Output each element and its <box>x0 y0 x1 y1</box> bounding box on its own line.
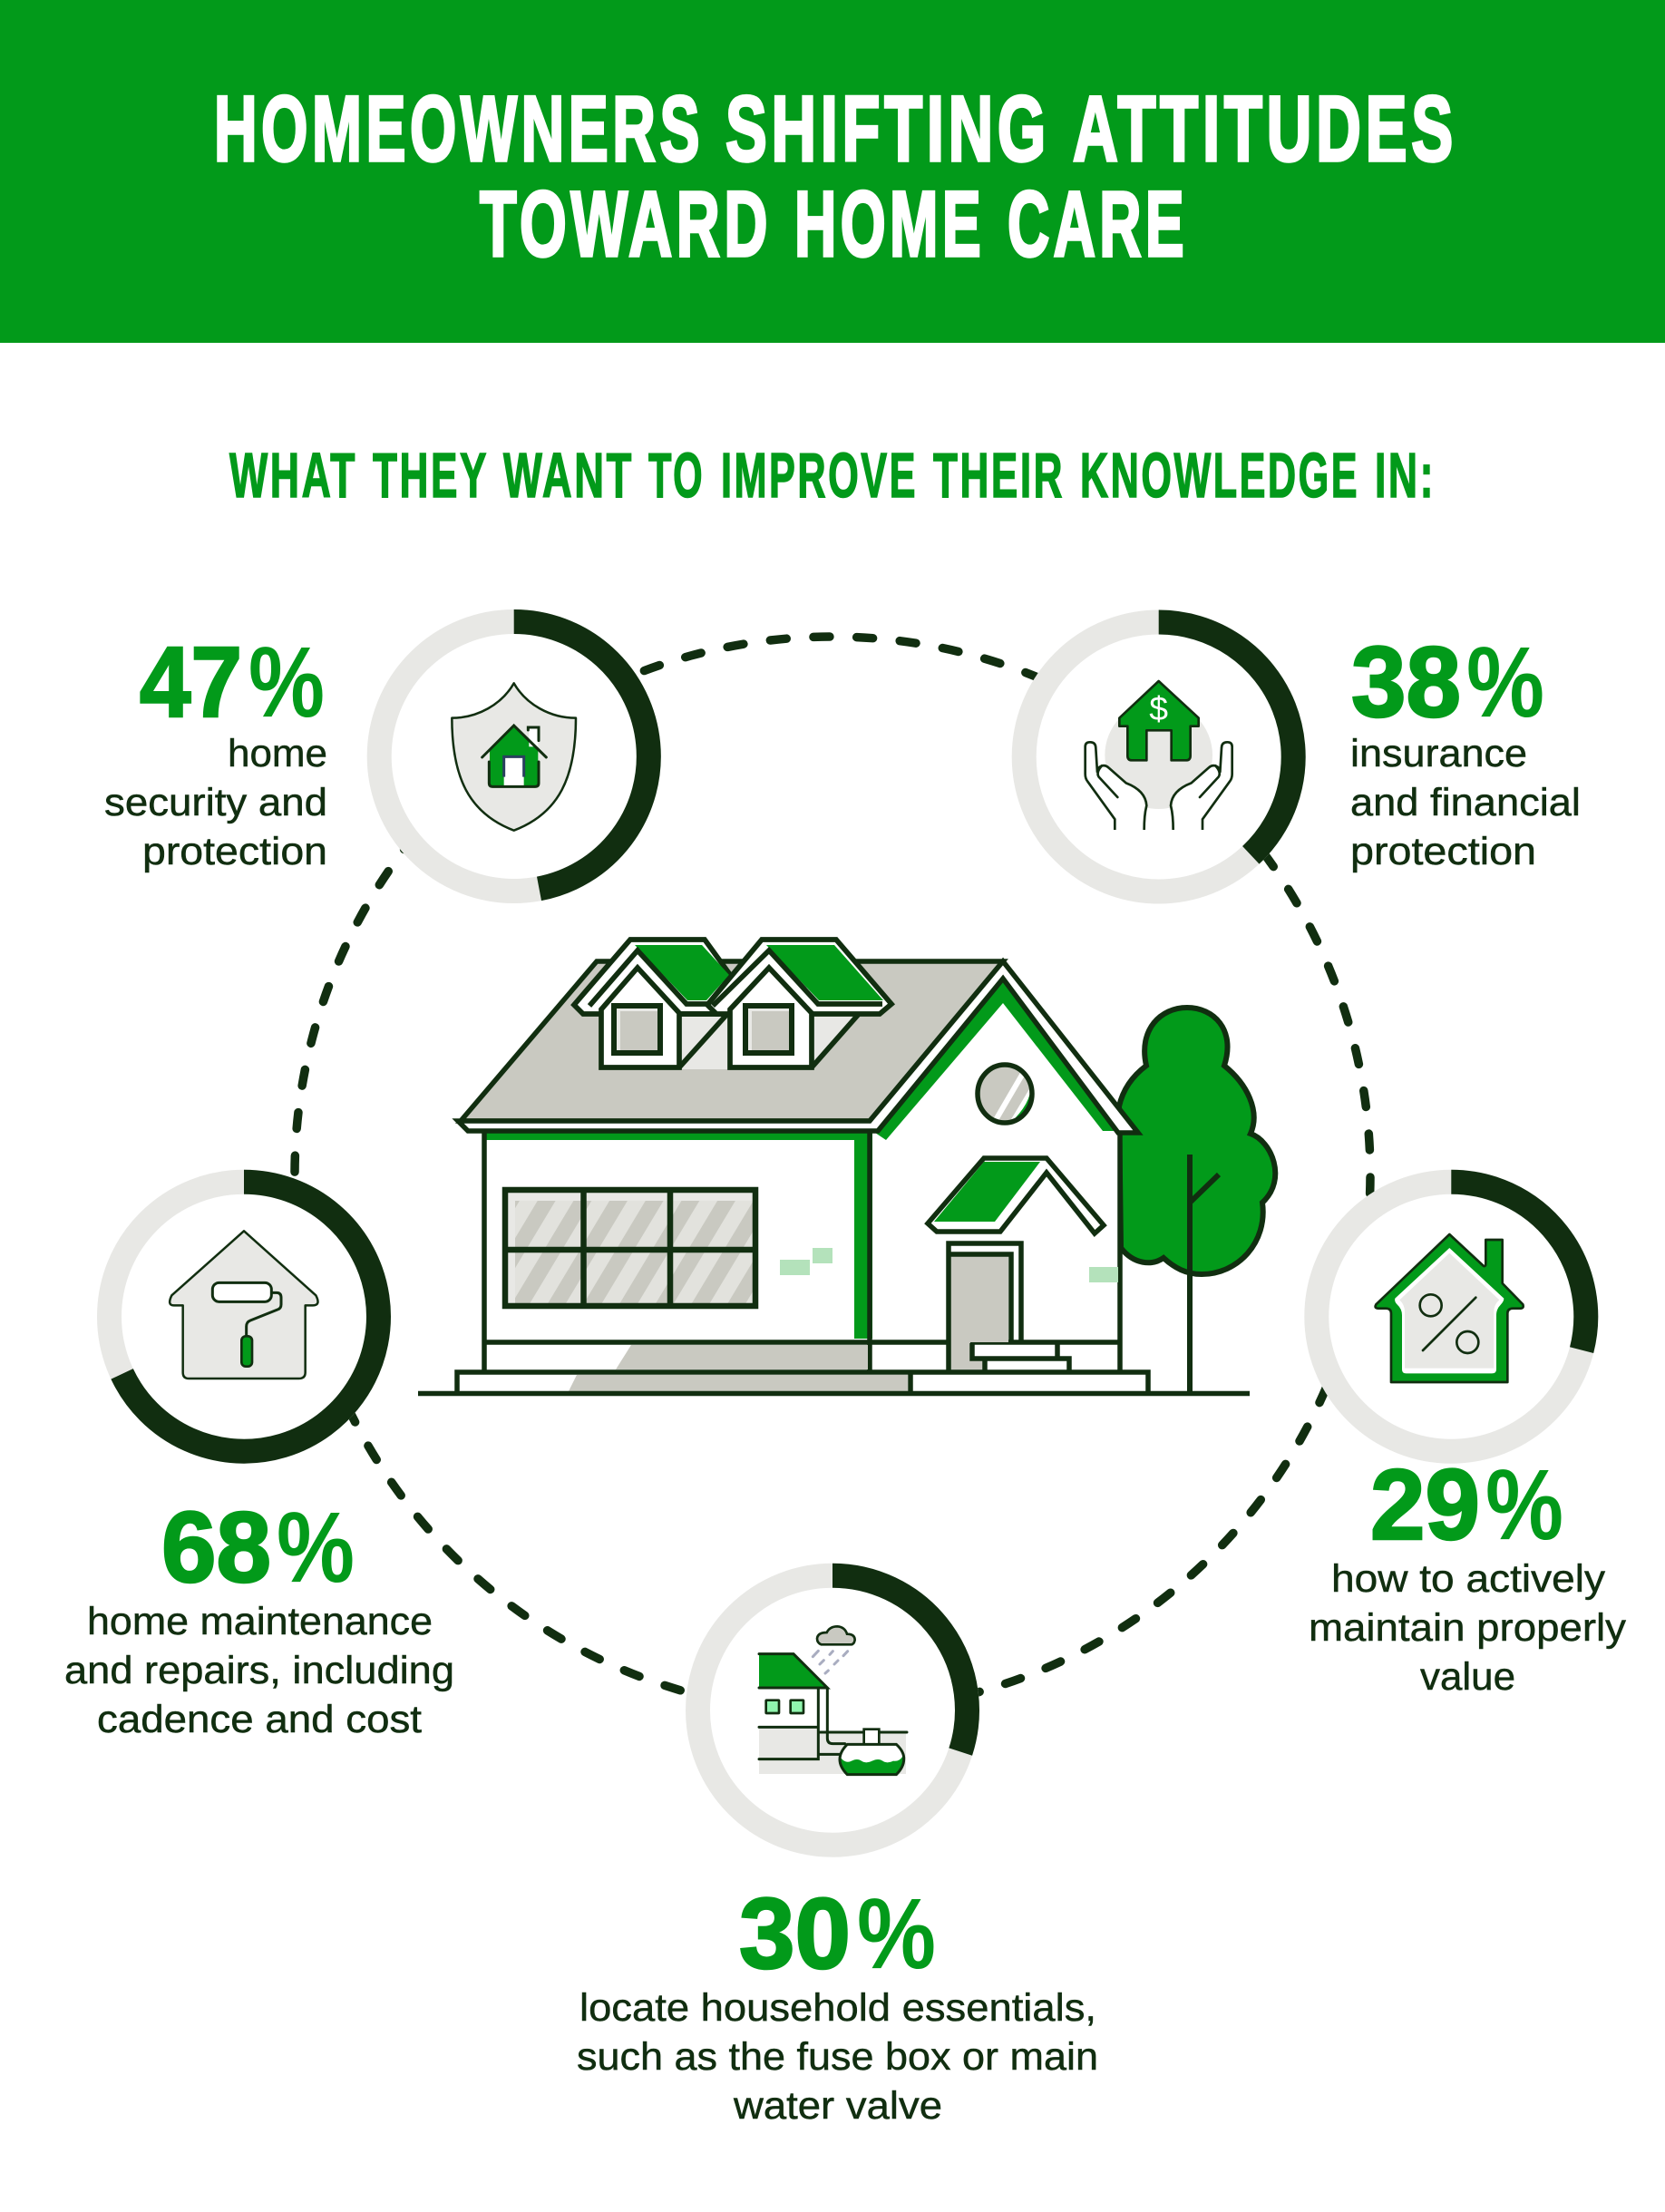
main roof <box>458 961 1138 1133</box>
subheading: TO <box>648 440 705 511</box>
subheading: WANT <box>503 440 634 511</box>
stat 29%: % <box>1485 1449 1563 1561</box>
stat 47% <box>140 627 325 738</box>
donut 29% <box>1317 1182 1586 1451</box>
stat 47%: 47 <box>140 627 242 738</box>
porch roof <box>928 1158 1104 1233</box>
icon: house with paint roller <box>170 1231 318 1379</box>
label: home security and protection: protection <box>142 830 327 873</box>
subheading: IMPROVE <box>721 440 918 511</box>
icon: house with water tank <box>759 1626 907 1775</box>
label: home maintenance and repairs <box>64 1600 454 1741</box>
label: home security and protection: security and <box>104 781 327 824</box>
stat 30% <box>739 1878 936 1990</box>
label: home security and protection <box>104 732 327 873</box>
label: home security and protection: home <box>228 732 327 775</box>
label: how to actively maintain property value: how to actively <box>1331 1557 1606 1601</box>
foundation and ground <box>418 1372 1250 1393</box>
porch steps <box>972 1343 1069 1371</box>
stat 68% <box>161 1492 355 1603</box>
right dormer <box>707 940 891 1067</box>
round attic window <box>978 1065 1038 1125</box>
stat 38%: % <box>1466 627 1544 738</box>
title <box>214 77 1457 276</box>
title: CARE <box>1008 172 1188 276</box>
title: HOMEOWNERS <box>214 77 704 180</box>
stat 47%: % <box>248 627 325 738</box>
label: locate household essentials: water valve <box>733 2084 942 2128</box>
left dormer <box>574 940 731 1067</box>
subheading: WHAT <box>229 440 357 511</box>
stat 30%: 30 <box>739 1878 851 1990</box>
wall brick accents <box>780 1248 1118 1282</box>
label: how to actively maintain property value: value <box>1420 1655 1515 1699</box>
subheading: THEY <box>373 440 489 511</box>
stat 38% <box>1351 627 1544 738</box>
label: how to actively maintain property value <box>1309 1557 1627 1699</box>
stat 29%: 29 <box>1370 1449 1480 1561</box>
large window <box>505 1190 755 1306</box>
donut 47% <box>379 621 648 891</box>
title: HOME <box>794 172 985 276</box>
title: ATTITUDES <box>1073 77 1457 180</box>
label: locate household essentials <box>577 1986 1098 2128</box>
driveway shadow <box>616 1345 868 1369</box>
dormer shadow panel <box>679 1014 858 1069</box>
panel: maintenance 68% <box>64 1182 454 1741</box>
house illustration <box>418 940 1275 1394</box>
tree <box>1119 1008 1275 1394</box>
dashed connecting circle <box>295 637 1370 1712</box>
label: locate household essentials: such as the fuse box or main <box>577 2035 1098 2079</box>
panel: insurance 38% <box>1024 622 1581 892</box>
label: insurance and financial protection: insurance <box>1350 732 1527 775</box>
label: home maintenance and repairs: home maintenance <box>87 1600 433 1643</box>
label: insurance and financial protection: protection <box>1350 830 1536 873</box>
subheading <box>229 440 1436 511</box>
panel: household essentials 30% <box>577 1575 1098 2128</box>
icon: house with percent <box>1376 1234 1524 1382</box>
label: home maintenance and repairs: and repairs, including <box>64 1649 454 1692</box>
subheading: IN: <box>1375 440 1436 511</box>
walls <box>484 979 1120 1372</box>
label: locate household essentials: locate household essentials, <box>579 1986 1096 2030</box>
front door <box>949 1243 1021 1371</box>
label: how to actively maintain property value: maintain properly <box>1309 1606 1627 1650</box>
subheading: THEIR <box>933 440 1065 511</box>
title: TOWARD <box>480 172 772 276</box>
icon: hands holding house with dollar <box>1086 681 1232 830</box>
donut 68% <box>109 1182 379 1451</box>
panel: property value 29% <box>1309 1182 1627 1699</box>
stat 38%: 38 <box>1351 627 1461 738</box>
panel: home security 47% <box>104 621 648 891</box>
icon: shield with house <box>452 683 576 831</box>
donut 30% <box>698 1575 967 1845</box>
label: home maintenance and repairs: cadence and cost <box>97 1698 422 1741</box>
stat 68%: 68 <box>161 1492 271 1603</box>
label: insurance and financial protection: and financial <box>1350 781 1581 824</box>
stat 30%: % <box>857 1878 936 1990</box>
title: SHIFTING <box>725 77 1050 180</box>
icon: hands holding house with dollar: $ <box>1149 689 1168 727</box>
donut 38% <box>1024 622 1293 892</box>
stat 68%: % <box>277 1492 355 1603</box>
subheading: KNOWLEDGE <box>1080 440 1359 511</box>
label: insurance and financial protection <box>1350 732 1581 873</box>
stat 29% <box>1370 1449 1563 1561</box>
header band <box>0 0 1665 343</box>
